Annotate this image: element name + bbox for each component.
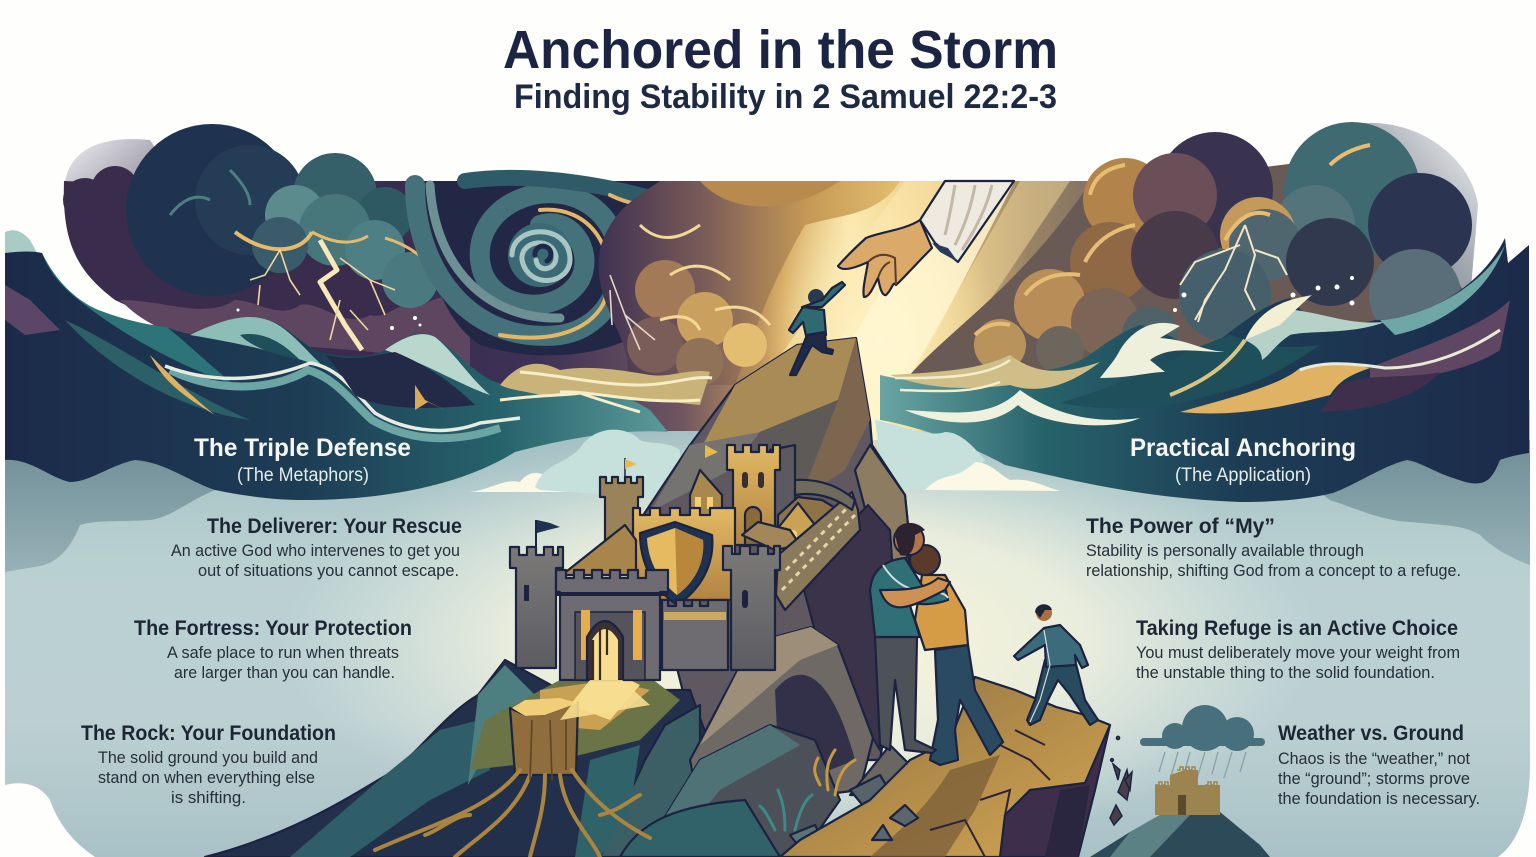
text: The Deliverer: An active God who intervenes to get you <box>171 542 460 560</box>
grassy plant <box>760 750 855 830</box>
text: The Power of My: The Power of “My” <box>1086 515 1275 538</box>
embracing figures <box>870 523 1003 765</box>
curved right wall <box>776 492 860 610</box>
storm clouds: left <box>63 124 470 370</box>
swirl vortex <box>415 178 700 356</box>
text: The Fortress: are larger than you can handle. <box>174 664 395 682</box>
storm waves: left <box>5 230 712 500</box>
lower right wall <box>662 600 728 670</box>
scene panel: lower sky <box>5 400 1530 857</box>
text: Weather vs. Ground: Chaos is the “weather,” not <box>1278 750 1470 768</box>
lightning: right <box>1180 225 1287 322</box>
storm waves: right <box>880 238 1529 502</box>
tree stump with roots <box>375 698 650 857</box>
text: The Deliverer: out of situations you cannot escape. <box>198 562 459 580</box>
text: Weather vs. Ground: the foundation is necessary. <box>1278 790 1480 808</box>
foreground big boulder <box>690 627 873 810</box>
left diagonal wall <box>562 525 636 575</box>
text: The Deliverer: The Deliverer: Your Rescue <box>207 515 462 538</box>
lightning: left <box>250 240 655 350</box>
castle <box>510 445 860 720</box>
mountain base and rocks <box>205 338 920 857</box>
right tower <box>723 546 780 670</box>
icon: storm cloud with castle on mountain <box>1090 705 1270 857</box>
title block <box>503 20 1058 116</box>
grey cloud left <box>5 440 240 572</box>
small houses <box>690 445 842 560</box>
text: Weather vs. Ground: Weather vs. Ground <box>1278 722 1464 745</box>
grey cloud right <box>1290 440 1530 565</box>
text: The Fortress <box>134 617 412 682</box>
heading: The Triple Defense: (The Metaphors) <box>237 465 369 486</box>
heading: Practical Anchoring: Practical Anchoring <box>1130 434 1356 462</box>
text: The Deliverer <box>171 515 462 580</box>
text: The Fortress: A safe place to run when threats <box>167 644 399 662</box>
title: Anchored in the Storm <box>503 20 1058 80</box>
text: The Rock: The Rock: Your Foundation <box>81 722 336 745</box>
text: The Power of My: relationship, shifting God from a concept to a refuge. <box>1086 562 1461 580</box>
clouds: right <box>895 122 1500 420</box>
cracked ledge <box>780 677 1110 857</box>
storm sky <box>200 181 1320 431</box>
lower rocks <box>640 725 840 857</box>
text: The Rock <box>81 722 336 807</box>
heading: Practical Anchoring <box>1130 434 1356 486</box>
left figure <box>875 637 936 753</box>
panel: Practical Anchoring <box>1086 434 1480 808</box>
text: The Fortress: The Fortress: Your Protection <box>134 617 412 640</box>
text: Weather vs. Ground: the “ground”; storms prove <box>1278 770 1470 788</box>
light beam from above <box>720 181 1070 495</box>
sleeve <box>920 181 1014 262</box>
text: Taking Refuge: You must deliberately move your weight from <box>1136 644 1460 662</box>
peak <box>640 338 910 760</box>
heading: The Triple Defense <box>194 434 411 486</box>
heading: Practical Anchoring: (The Application) <box>1175 465 1311 486</box>
text: The Power of My <box>1086 515 1461 580</box>
small figure reaching up <box>789 282 845 375</box>
shield <box>640 522 712 605</box>
text: Taking Refuge <box>1136 617 1460 682</box>
subtitle: Finding Stability in 2 Samuel 22:2-3 <box>514 78 1057 116</box>
text: Weather vs. Ground <box>1278 722 1480 808</box>
central gold keep <box>633 508 735 600</box>
falling rocks <box>1110 736 1132 825</box>
heading: The Triple Defense: The Triple Defense <box>194 434 411 462</box>
back tower with flag <box>600 458 643 565</box>
hand <box>838 220 932 297</box>
base teal rocks <box>205 660 750 857</box>
text: The Rock: stand on when everything else <box>98 769 315 787</box>
figure walking to refuge <box>1014 604 1098 725</box>
text: The Rock: The solid ground you build and <box>98 749 318 767</box>
left tower <box>510 520 563 668</box>
tall gold tower <box>727 445 795 545</box>
panel: The Triple Defense <box>81 434 462 807</box>
pale clouds behind the castle <box>470 420 1060 500</box>
wave body crests <box>42 253 235 385</box>
text: Taking Refuge: the unstable thing to the solid foundation. <box>1136 664 1435 682</box>
right figure legs and shirt <box>930 645 1003 765</box>
text: Taking Refuge: Taking Refuge is an Active Choice <box>1136 617 1458 640</box>
clouds: golden centre left <box>599 181 900 386</box>
text: The Power of My: Stability is personally available through <box>1086 542 1364 560</box>
gatehouse <box>556 570 668 720</box>
text: The Rock: is shifting. <box>171 789 246 807</box>
hand of God <box>838 181 1014 297</box>
